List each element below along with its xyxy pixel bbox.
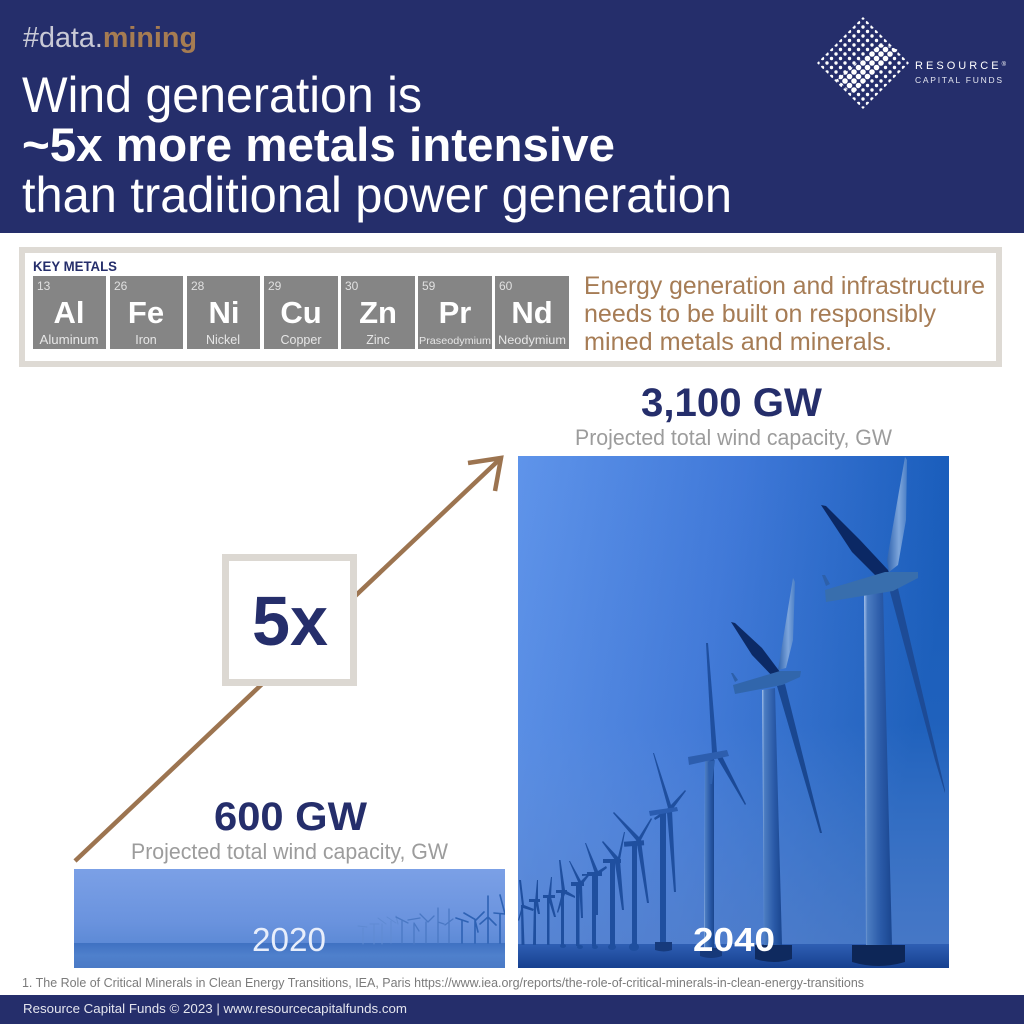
logo: Resource Capital Funds: ® [1002, 61, 1007, 68]
element: neodymium: 60 [499, 279, 513, 293]
value: 3,100 GW: 3,100 GW [641, 381, 822, 425]
logo: Resource Capital Funds: RESOURCE [915, 60, 999, 72]
distant small turbines [358, 895, 505, 944]
footer bar [0, 995, 1024, 1024]
element: iron: Fe [128, 295, 164, 330]
hashtag: data mining: #data.mining [23, 22, 197, 54]
element: copper [264, 276, 338, 349]
value: 600 GW [131, 795, 448, 864]
year label: 2020: 2020 [252, 921, 326, 958]
element: aluminum: Al [54, 295, 84, 330]
year label: 2040: 2040 [693, 921, 775, 958]
statement text: needs to be built on responsibly [584, 300, 936, 328]
logo: Resource Capital Funds [817, 17, 1007, 109]
turbine 2 [731, 578, 822, 962]
footnote: 1. The Role of Critical Minerals in Clean Energy Transitions, IEA, Paris https://www.iea.org/reports/the-role-of-critical-minerals-in-clean-energy-transitions [22, 976, 864, 990]
title: Wind generation is [22, 67, 422, 123]
element: nickel: 28 [191, 279, 205, 293]
element: iron [110, 276, 183, 349]
label: projected capacity 2040: Projected total wind capacity, GW [575, 425, 892, 450]
value: 3,100 GW [575, 381, 892, 450]
footer bar: Resource Capital Funds © 2023 | www.resourcecapitalfunds.com [23, 1001, 407, 1016]
element: nickel [187, 276, 260, 349]
element: iron: Iron [135, 333, 157, 347]
element: copper: 29 [268, 279, 282, 293]
value: 600 GW: 600 GW [214, 795, 367, 839]
element: zinc: Zn [359, 295, 397, 330]
element: nickel: Ni [208, 295, 240, 330]
statement text: Energy generation and infrastructure [584, 272, 985, 300]
element: praseodymium [418, 276, 492, 349]
element: aluminum: Aluminum [40, 333, 98, 347]
element: zinc: 30 [345, 279, 359, 293]
element: copper: Copper [280, 333, 322, 347]
image: wind farm 2040 [518, 456, 949, 968]
element: zinc: Zinc [366, 333, 390, 347]
element: neodymium: Neodymium [498, 335, 566, 347]
panel: key metals [22, 250, 999, 364]
growth arrow [75, 458, 501, 861]
element: neodymium [495, 276, 569, 349]
element: nickel: Nickel [206, 333, 240, 347]
element: praseodymium: Praseodymium [419, 335, 491, 347]
element: praseodymium: 59 [422, 279, 436, 293]
heading: key metals: KEY METALS [33, 259, 117, 274]
element: aluminum: 13 [37, 279, 51, 293]
turbine 1 [821, 457, 945, 966]
callout: 5x: 5x [252, 582, 328, 660]
element: neodymium: Nd [511, 295, 553, 330]
title: ~5x more metals intensive [22, 118, 615, 171]
logo: Resource Capital Funds: CAPITAL FUNDS [915, 75, 1002, 85]
statement text: mined metals and minerals. [584, 328, 892, 356]
turbine 3 [688, 643, 746, 958]
element: praseodymium: Pr [439, 295, 471, 330]
title [22, 67, 732, 223]
statement text [584, 272, 985, 356]
header band [0, 0, 1024, 233]
label: projected capacity 2020: Projected total wind capacity, GW [131, 839, 448, 864]
callout: 5x [226, 558, 354, 682]
title: than traditional power generation [22, 167, 732, 223]
element: zinc [341, 276, 415, 349]
element: aluminum [33, 276, 106, 349]
element: iron: 26 [114, 279, 128, 293]
element: copper: Cu [280, 295, 322, 330]
image: wind farm 2020 [74, 869, 505, 968]
distant turbines [518, 753, 686, 952]
